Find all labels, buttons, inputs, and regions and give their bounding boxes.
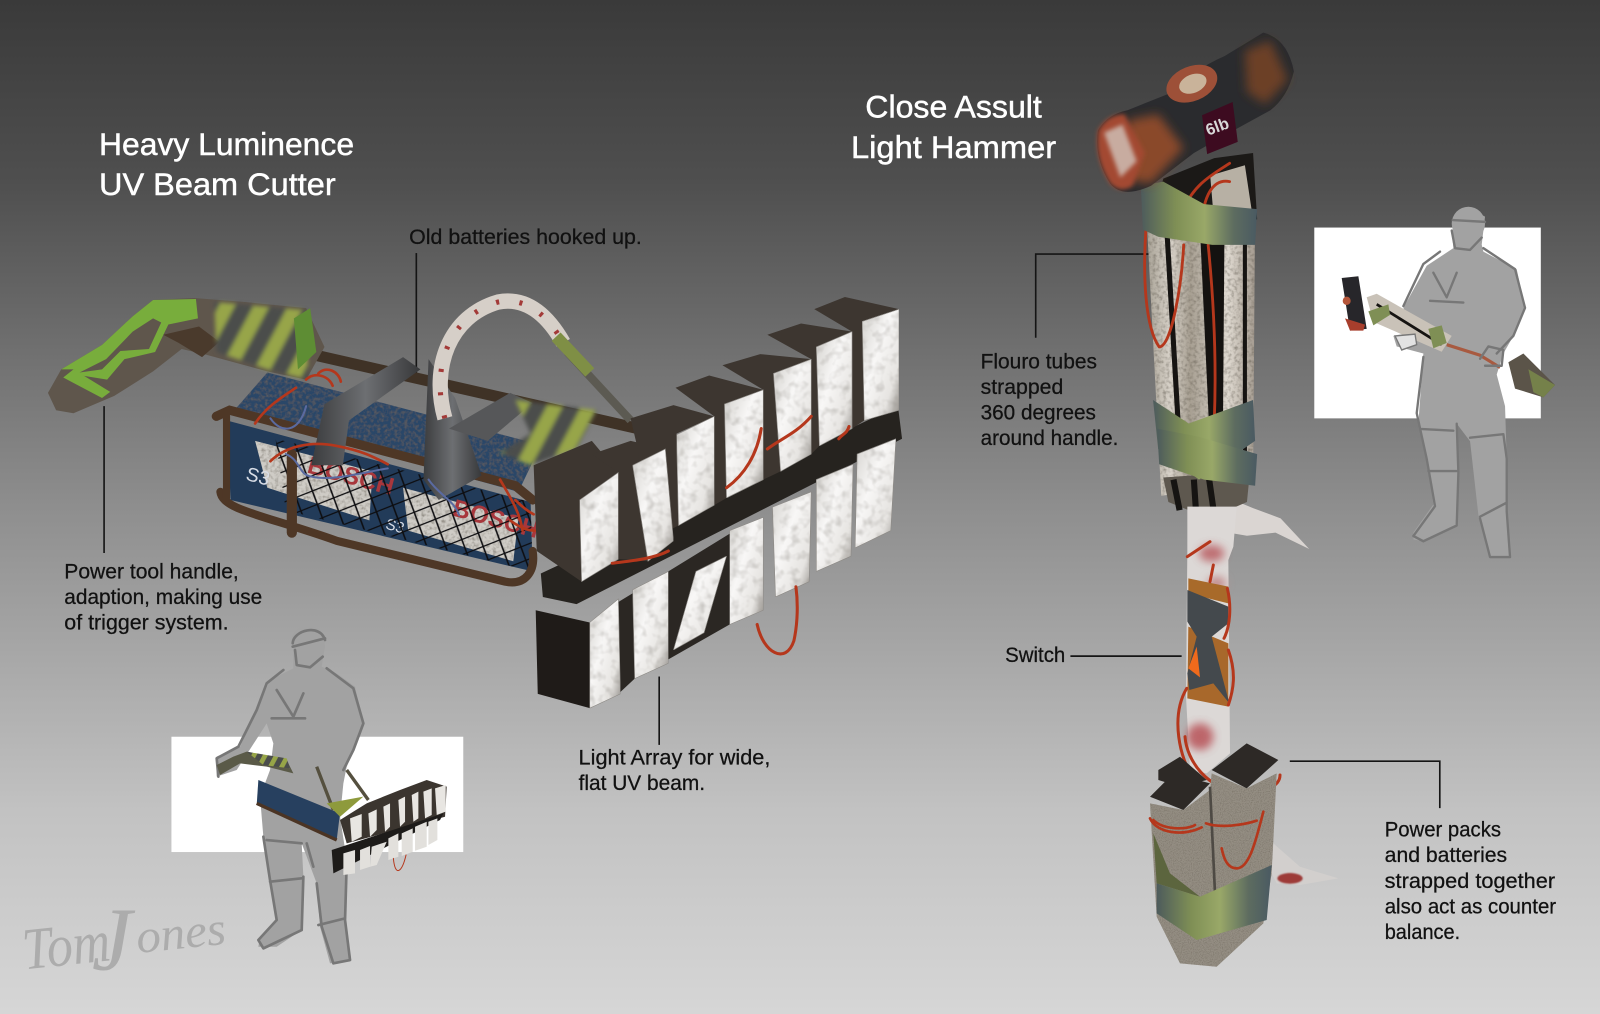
hammer head: 6lb	[1203, 114, 1232, 139]
green camouflage strap upper	[1141, 182, 1257, 245]
battery front face: S3	[244, 463, 272, 491]
battery front face: S3	[384, 516, 406, 537]
title: Close Assult Light Hammer: Close Assult	[865, 88, 1042, 124]
label: power packs: balance.	[1385, 921, 1460, 944]
label: power tool handle: of trigger system.	[64, 612, 229, 635]
label: light array	[579, 746, 770, 795]
light array spine	[541, 406, 902, 604]
battery front face	[227, 420, 542, 571]
leader line: flouro tubes	[1036, 254, 1149, 338]
label: flouro tubes: strapped	[981, 376, 1063, 399]
light array lower row	[536, 439, 896, 708]
label: power packs: and batteries	[1385, 844, 1507, 867]
camouflage wrap	[500, 400, 597, 465]
label: light array: Light Array for wide,	[579, 746, 770, 769]
illustration: beam cutter weapon	[48, 297, 902, 708]
leader line: power packs	[1290, 761, 1440, 808]
label: light array: flat UV beam.	[579, 772, 705, 795]
title: Heavy Luminence UV Beam Cutter	[99, 126, 354, 202]
title: Heavy Luminence UV Beam Cutter: Heavy Luminence	[99, 126, 354, 162]
leader line: switch	[1070, 655, 1182, 657]
battery top	[233, 372, 541, 492]
signature: J	[92, 890, 136, 989]
green camouflage straps lower	[1153, 400, 1257, 486]
label: flouro tubes: Flouro tubes	[981, 350, 1097, 373]
label: switch: Switch	[1005, 644, 1065, 667]
signature	[19, 890, 228, 989]
cloth arch strap	[440, 301, 631, 420]
reference sketch: figure holding hammer	[1314, 207, 1555, 557]
label: power tool handle: adaption, making use	[64, 586, 262, 609]
white backdrop panel	[1314, 228, 1541, 418]
signature: ones	[133, 903, 228, 964]
cloth tail at tube base	[1229, 498, 1309, 549]
battery front face: BOSCH	[449, 495, 542, 544]
rear support bar	[306, 353, 638, 429]
wrapped cloth shaft with switch	[1178, 507, 1280, 793]
leader line: old batteries	[415, 253, 417, 380]
figure sketch	[217, 626, 363, 963]
label: flouro tubes	[981, 350, 1118, 450]
label: power packs	[1385, 819, 1556, 944]
white backdrop panel	[171, 737, 463, 852]
label: power tool handle: Power tool handle,	[64, 561, 239, 584]
label: power tool handle	[64, 561, 262, 635]
leader line: light array	[658, 677, 660, 745]
signature: Tom	[19, 908, 113, 982]
reference sketch: figure holding cutter	[171, 626, 463, 963]
flouro tube handle	[1145, 153, 1257, 518]
miniature hammer	[1342, 276, 1555, 397]
power tool handle	[48, 298, 324, 413]
illustration: light hammer	[1097, 33, 1338, 967]
battery front face: BOSCH	[305, 452, 397, 501]
hammer head	[1097, 33, 1294, 192]
title: Heavy Luminence UV Beam Cutter: UV Beam Cutter	[99, 166, 336, 202]
label: power packs: strapped together	[1385, 870, 1555, 893]
label: old batteries: Old batteries hooked up.	[409, 226, 642, 249]
battery pack	[1150, 743, 1338, 967]
label: flouro tubes: 360 degrees	[981, 401, 1096, 424]
red array wires	[612, 416, 849, 654]
label: power packs: Power packs	[1385, 819, 1501, 842]
grey tape straps	[311, 357, 533, 500]
label: flouro tubes: around handle.	[981, 427, 1118, 450]
title: Close Assult Light Hammer: Light Hammer	[851, 129, 1056, 165]
panel: UV beam cutter concept	[19, 126, 902, 989]
leader line: power tool handle	[103, 406, 105, 553]
panel: light hammer concept	[851, 33, 1556, 967]
light array upper row	[534, 297, 899, 582]
miniature cutter	[217, 752, 447, 875]
battery wires	[255, 370, 535, 531]
rusty cage frame	[216, 410, 533, 582]
figure sketch	[1393, 207, 1525, 557]
title: Close Assult Light Hammer	[851, 88, 1056, 165]
label: power packs: also act as counter	[1385, 895, 1556, 918]
